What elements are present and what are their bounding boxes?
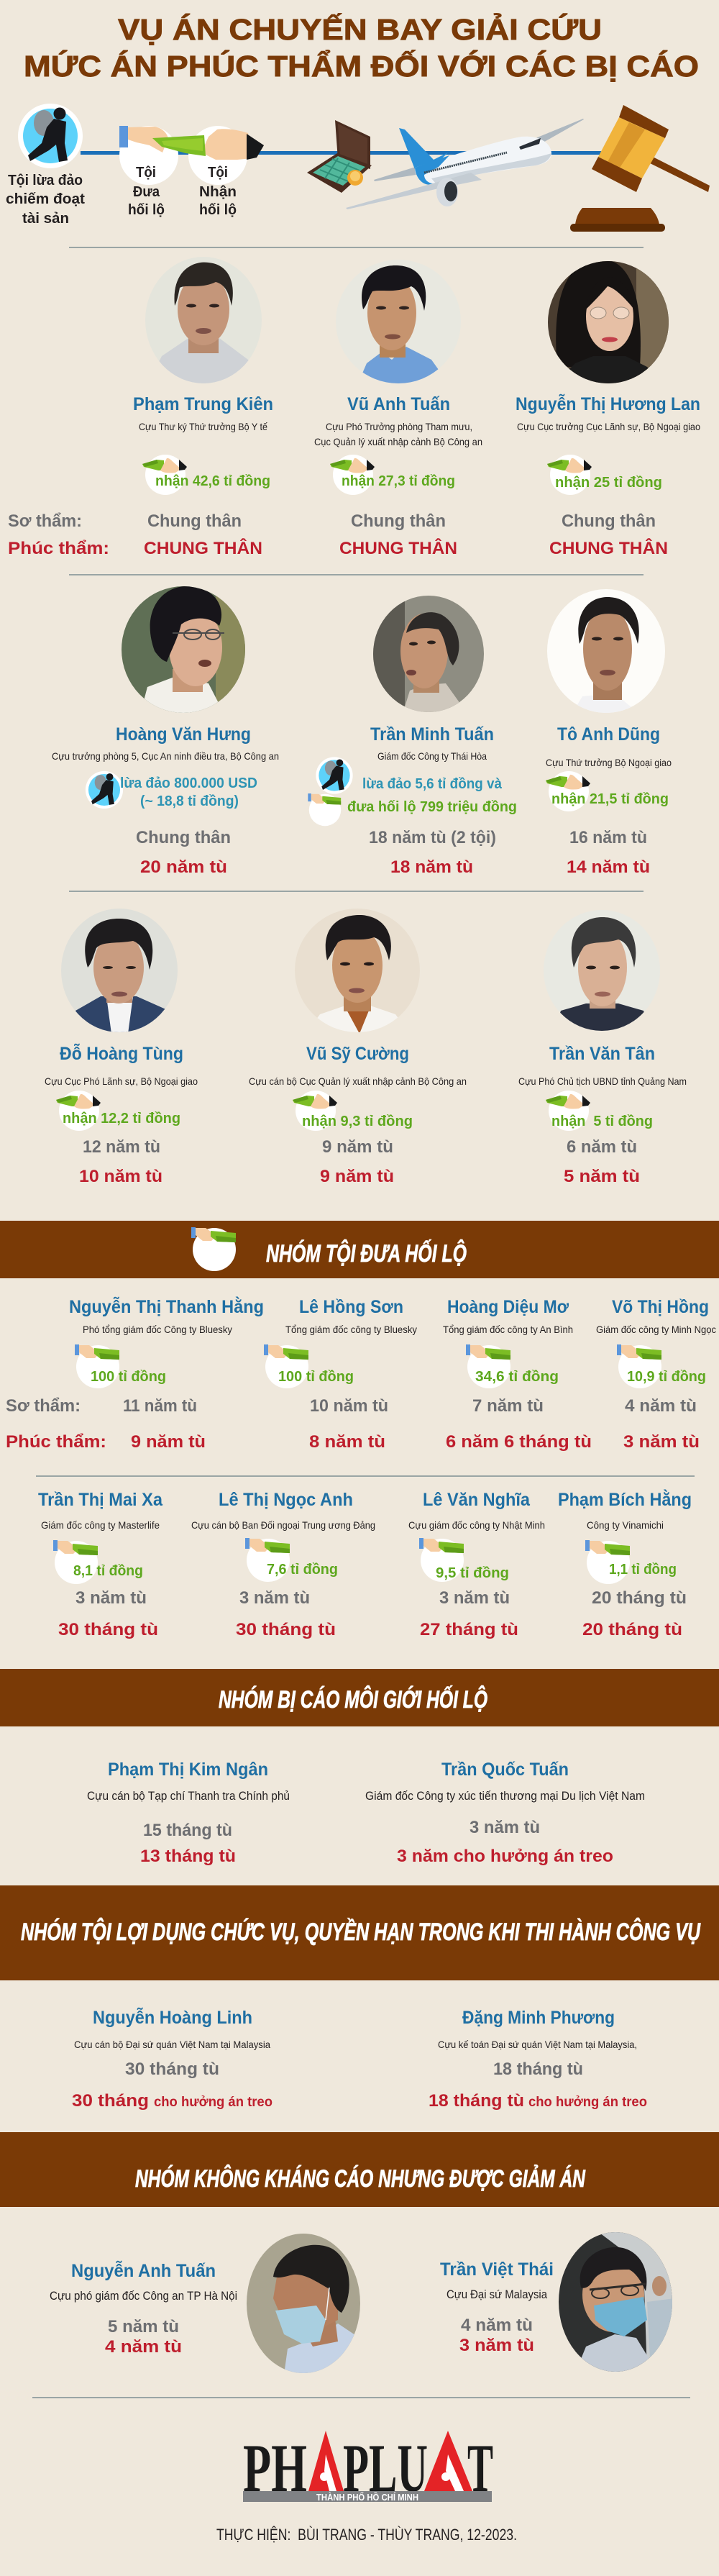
panel: Tô Anh Dũng — [546, 588, 672, 877]
name: Nguyễn Hoàng Linh — [93, 2006, 252, 2028]
icon: receiving bribe — [293, 1091, 337, 1131]
icon: receiving bribe — [56, 1091, 101, 1131]
appeal sentence: CHUNG THÂN — [144, 538, 262, 558]
role: Cựu Phó Trưởng phòng Tham mưu, — [326, 421, 472, 432]
role: Cựu Cục Phó Lãnh sự, Bộ Ngoại giao — [45, 1075, 198, 1087]
panel: Nguyễn Thị Thanh Hằng — [69, 1296, 264, 1452]
appeal sentence: 30 tháng tù — [236, 1620, 336, 1639]
name: Nguyễn Anh Tuấn — [71, 2259, 216, 2281]
amount: fraud: lừa đảo 5,6 tỉ đồng và — [362, 776, 503, 792]
portrait — [546, 259, 671, 385]
panel: Lê Thị Ngọc Anh — [191, 1490, 375, 1639]
name: Đỗ Hoàng Tùng — [60, 1042, 183, 1064]
amount: nhận 5 tỉ đồng — [551, 1114, 653, 1129]
name: Lê Thị Ngọc Anh — [219, 1490, 353, 1510]
label: bribe receiving: Nhận — [199, 184, 237, 200]
appeal sentence: 9 năm tù — [320, 1167, 394, 1186]
appeal sentence: 5 năm tù — [564, 1167, 640, 1186]
amount — [120, 775, 257, 809]
appeal sentence: 3 năm tù — [459, 2336, 534, 2355]
icon: thief with money bag — [18, 104, 83, 168]
role: Cựu cán bộ Đại sứ quán Việt Nam tại Malaysia — [74, 2039, 270, 2050]
first instance sentence: 20 tháng tù — [592, 1588, 687, 1608]
portrait — [245, 2232, 363, 2375]
label: fraud crime: Tội lừa đảo — [8, 173, 83, 188]
panel: row labels first instance: Phúc thẩm: — [8, 539, 109, 558]
name: Lê Hồng Sơn — [299, 1297, 403, 1317]
role: Cục Quản lý xuất nhập cảnh Bộ Công an — [314, 436, 482, 447]
appeal sentence: 18 tháng tù — [429, 2091, 524, 2111]
panel: Hoàng Văn Hưng — [52, 585, 279, 877]
name: Nguyễn Thị Thanh Hằng — [69, 1296, 264, 1317]
role: Cựu cán bộ Tạp chí Thanh tra Chính phủ — [87, 1789, 290, 1803]
first instance sentence: 30 tháng tù — [125, 2060, 219, 2079]
appeal sentence: 20 năm tù — [140, 857, 227, 877]
logo grey bar — [243, 2491, 492, 2502]
amount: 100 tỉ đồng — [278, 1369, 354, 1385]
icon: briefcase of money — [307, 120, 372, 193]
amount: 34,6 tỉ đồng — [475, 1369, 559, 1385]
name: Phạm Bích Hằng — [558, 1488, 692, 1510]
amount: nhận 9,3 tỉ đồng — [302, 1114, 413, 1129]
band: no appeal group — [0, 2132, 719, 2207]
amount: 100 tỉ đồng — [91, 1369, 166, 1385]
panel: Nguyễn Thị Hương Lan — [516, 259, 700, 558]
appeal sentence: 10 năm tù — [79, 1167, 162, 1186]
icon: giving bribe — [75, 1344, 119, 1388]
first instance sentence: 7 năm tù — [472, 1396, 544, 1416]
panel: Phạm Trung Kiên — [133, 255, 273, 558]
icon: gavel — [570, 105, 710, 232]
panel: Nguyễn Anh Tuấn — [50, 2232, 363, 2375]
appeal sentence: 27 tháng tù — [420, 1620, 518, 1639]
amount: nhận 12,2 tỉ đồng — [63, 1111, 180, 1127]
title: VỤ ÁN CHUYẾN BAY GIẢI CỨU — [118, 13, 602, 46]
logo letters: PH — [243, 2430, 307, 2506]
icon: giving bribe — [466, 1344, 510, 1388]
panel: Vũ Anh Tuấn — [314, 258, 482, 558]
title: MỨC ÁN PHÚC THẨM ĐỐI VỚI CÁC BỊ CÁO — [24, 49, 699, 83]
label: bribe giving: Đưa — [133, 184, 160, 200]
amount: 1,1 tỉ đồng — [609, 1562, 677, 1578]
icon: giving bribe — [617, 1344, 661, 1388]
icon: airplane — [346, 119, 584, 209]
role: Cựu cán bộ Cục Quản lý xuất nhập cảnh Bộ Công an — [249, 1075, 467, 1087]
row labels: bribe giving group: Sơ thẩm: — [6, 1396, 81, 1416]
portrait — [362, 265, 439, 383]
first instance sentence: 3 năm tù — [439, 1588, 510, 1608]
name: Trần Quốc Tuấn — [441, 1760, 569, 1780]
panel: Trần Minh Tuấn — [308, 594, 517, 877]
label: bribe receiving: hối lộ — [199, 202, 237, 218]
role: Cựu Phó Chủ tịch UBND tỉnh Quảng Nam — [518, 1075, 687, 1087]
portrait — [293, 907, 421, 1034]
name: Vũ Sỹ Cường — [306, 1044, 409, 1064]
amount: 8,1 tỉ đồng — [73, 1563, 143, 1579]
icon: receiving bribe — [547, 455, 592, 495]
icon: giving bribe — [585, 1540, 630, 1584]
panel: Lê Văn Nghĩa — [408, 1490, 545, 1639]
name: Phạm Trung Kiên — [133, 394, 273, 414]
heading: NHÓM TỘI ĐƯA HỐI LỘ — [266, 1239, 467, 1267]
band: bribery brokers group — [0, 1669, 719, 1726]
label: fraud crime — [6, 173, 85, 227]
heading: NHÓM BỊ CÁO MÔI GIỚI HỐI LỘ — [219, 1685, 487, 1713]
label: bribe giving: hối lộ — [128, 202, 165, 218]
logo red letter Á — [308, 2431, 344, 2491]
icon: receiving bribe — [330, 455, 375, 495]
panel: Phạm Bích Hằng — [558, 1488, 692, 1639]
logo: Pháp Luật — [243, 2430, 493, 2506]
panel: Phạm Thị Kim Ngân — [87, 1760, 290, 1866]
role: Công ty Vinamichi — [587, 1519, 664, 1531]
role: Cựu trưởng phòng 5, Cục An ninh điều tra, Bộ Công an — [52, 750, 279, 762]
icon: giving bribe — [308, 793, 341, 826]
role: Cựu Thư ký Thứ trưởng Bộ Y tế — [139, 421, 267, 432]
amount: (~ 18,8 tỉ đồng) — [140, 793, 239, 809]
first instance sentence: Chung thân — [136, 828, 231, 847]
title — [24, 13, 699, 83]
icon: thief — [316, 757, 353, 794]
logo letters — [243, 2430, 493, 2506]
divider — [69, 574, 644, 575]
portrait — [60, 907, 179, 1034]
name: Hoàng Diệu Mơ — [447, 1297, 569, 1317]
first instance sentence: 18 năm tù (2 tội) — [369, 828, 496, 847]
appeal sentence: 3 năm tù — [623, 1432, 700, 1452]
panel: row labels first instance: Sơ thẩm: — [8, 511, 82, 531]
name: Trần Minh Tuấn — [370, 724, 494, 745]
first instance sentence: 4 năm tù — [625, 1396, 697, 1416]
amount: 7,6 tỉ đồng — [267, 1562, 338, 1578]
portrait — [144, 255, 265, 385]
name: Trần Việt Thái — [440, 2259, 554, 2280]
divider — [36, 1475, 695, 1477]
logo subtitle: THÀNH PHỐ HỒ CHÍ MINH — [316, 2492, 418, 2503]
logo letters: PLU — [343, 2430, 428, 2506]
appeal sentence — [429, 2091, 647, 2111]
appeal sentence: cho hưởng án treo — [528, 2095, 647, 2110]
portrait — [372, 594, 485, 714]
icon: hands exchanging money — [119, 126, 264, 185]
first instance sentence: 3 năm tù — [239, 1588, 310, 1608]
role — [314, 421, 482, 447]
icon: receiving bribe — [142, 455, 187, 495]
portrait — [546, 588, 667, 714]
appeal sentence — [72, 2091, 273, 2111]
role: Tổng giám đốc công ty Bluesky — [285, 1324, 417, 1335]
icon: giving bribe — [419, 1538, 464, 1582]
panel: Vũ Sỹ Cường — [249, 907, 467, 1186]
label: fraud crime: tài sản — [22, 211, 69, 227]
portrait — [120, 585, 247, 714]
name: Trần Văn Tân — [549, 1044, 655, 1064]
role: Cựu Đại sứ Malaysia — [446, 2288, 547, 2301]
first instance sentence: 12 năm tù — [83, 1137, 160, 1157]
first instance sentence: Chung thân — [147, 511, 242, 531]
icon: giving bribe — [245, 1538, 290, 1582]
divider — [69, 247, 644, 248]
first instance sentence: 15 tháng tù — [143, 1821, 232, 1840]
role: Cựu kế toán Đại sứ quán Việt Nam tại Malaysia, — [438, 2039, 637, 2050]
icon: receiving bribe — [546, 771, 590, 811]
label: bribe receiving — [199, 165, 237, 218]
icon: receiving bribe — [546, 1091, 590, 1131]
amount: nhận 21,5 tỉ đồng — [551, 791, 669, 807]
icon: thief — [86, 771, 123, 809]
appeal sentence: CHUNG THÂN — [339, 538, 457, 558]
label: fraud crime: chiếm đoạt — [6, 191, 85, 207]
panel: Lê Hồng Sơn — [264, 1297, 417, 1452]
appeal sentence: 18 năm tù — [390, 857, 473, 877]
panel: row labels first instance — [8, 511, 109, 558]
appeal sentence: 13 tháng tù — [140, 1847, 236, 1866]
first instance sentence: Chung thân — [562, 511, 656, 531]
first instance sentence: Chung thân — [351, 511, 446, 531]
role: Cựu giám đốc công ty Nhật Minh — [408, 1519, 545, 1531]
header illustration — [6, 104, 710, 232]
role: Cựu phó giám đốc Công an TP Hà Nội — [50, 2289, 237, 2303]
logo letters: T — [467, 2430, 493, 2506]
appeal sentence: CHUNG THÂN — [549, 538, 668, 558]
first instance sentence: 16 năm tù — [569, 828, 647, 847]
portrait — [557, 2231, 674, 2373]
role: Cựu Cục trưởng Cục Lãnh sự, Bộ Ngoại giao — [517, 421, 700, 432]
first instance sentence: 10 năm tù — [310, 1396, 388, 1416]
label: bribe giving — [128, 165, 165, 218]
appeal sentence: 30 tháng tù — [58, 1620, 158, 1639]
name: Đặng Minh Phương — [462, 2008, 615, 2028]
name: Nguyễn Thị Hương Lan — [516, 393, 700, 414]
first instance sentence: 6 năm tù — [567, 1137, 637, 1157]
appeal sentence: cho hưởng án treo — [154, 2095, 273, 2110]
amount: lừa đảo 800.000 USD — [120, 775, 257, 791]
row labels: bribe giving group — [6, 1396, 106, 1452]
first instance sentence: 3 năm tù — [470, 1818, 540, 1837]
name: Lê Văn Nghĩa — [423, 1490, 531, 1510]
logo red letter Ậ — [424, 2431, 472, 2491]
name: Hoàng Văn Hưng — [116, 724, 251, 745]
name: Trần Thị Mai Xa — [38, 1490, 163, 1510]
panel: Trần Văn Tân — [518, 909, 687, 1186]
icon: giving bribe — [264, 1344, 308, 1388]
panel: Đặng Minh Phương — [429, 2008, 647, 2111]
icon: giving bribe — [53, 1540, 98, 1584]
role: Cựu Thứ trưởng Bộ Ngoại giao — [546, 757, 672, 768]
label: bribe receiving: Tội — [208, 165, 228, 181]
icon: giving bribe — [191, 1227, 236, 1271]
appeal sentence: 9 năm tù — [131, 1432, 206, 1452]
appeal sentence: 6 năm 6 tháng tù — [446, 1432, 592, 1452]
amount: bribe: đưa hối lộ 799 triệu đồng — [347, 799, 517, 815]
role: Phó tổng giám đốc Công ty Bluesky — [83, 1324, 232, 1335]
appeal sentence: 3 năm cho hưởng án treo — [397, 1847, 613, 1866]
label: bribe giving: Tội — [136, 165, 156, 181]
role: Tổng giám đốc công ty An Bình — [443, 1324, 573, 1335]
panel: Trần Thị Mai Xa — [38, 1490, 163, 1639]
panel: Đỗ Hoàng Tùng — [45, 907, 198, 1186]
role: Cựu cán bộ Ban Đối ngoại Trung ương Đảng — [191, 1519, 375, 1531]
credit line: THỰC HIỆN: BÙI TRANG - THÙY TRANG, 12-2023. — [216, 2526, 517, 2544]
name: Phạm Thị Kim Ngân — [108, 1760, 268, 1780]
name: Vũ Anh Tuấn — [347, 394, 450, 414]
first instance sentence: 3 năm tù — [75, 1588, 147, 1608]
panel: Hoàng Diệu Mơ — [443, 1297, 592, 1452]
appeal sentence: 14 năm tù — [567, 857, 650, 877]
appeal sentence: 4 năm tù — [105, 2337, 182, 2357]
divider — [32, 2397, 690, 2398]
role: Giám đốc Công ty xúc tiến thương mại Du lịch Việt Nam — [365, 1789, 645, 1803]
blue timeline line — [81, 151, 605, 155]
amount: nhận 25 tỉ đồng — [555, 475, 662, 491]
role: Giám đốc công ty Masterlife — [41, 1519, 160, 1531]
first instance sentence: 11 năm tù — [123, 1396, 197, 1416]
portrait — [560, 917, 644, 1031]
role: Giám đốc Công ty Thái Hòa — [377, 750, 487, 762]
band: bribe giving group — [0, 1221, 719, 1278]
first instance sentence: 9 năm tù — [322, 1137, 393, 1157]
appeal sentence: 20 tháng tù — [582, 1620, 682, 1639]
name: Tô Anh Dũng — [557, 724, 660, 745]
row labels: bribe giving group: Phúc thẩm: — [6, 1432, 106, 1452]
first instance sentence: 4 năm tù — [461, 2316, 533, 2335]
first instance sentence: 5 năm tù — [108, 2317, 179, 2336]
amount: nhận 42,6 tỉ đồng — [155, 473, 270, 489]
divider — [69, 891, 644, 892]
panel: Trần Việt Thái — [440, 2231, 674, 2373]
amount: nhận 27,3 tỉ đồng — [342, 473, 455, 489]
amount: 9,5 tỉ đồng — [436, 1565, 509, 1581]
panel: Trần Quốc Tuấn — [365, 1760, 645, 1866]
band: abuse of position group — [0, 1885, 719, 1980]
panel: Võ Thị Hồng — [596, 1297, 716, 1452]
panel: Nguyễn Hoàng Linh — [72, 2006, 273, 2111]
first instance sentence: 18 tháng tù — [493, 2060, 583, 2079]
name: Võ Thị Hồng — [612, 1297, 709, 1317]
amount: 10,9 tỉ đồng — [627, 1369, 706, 1385]
appeal sentence: 30 tháng — [72, 2091, 149, 2111]
appeal sentence: 8 năm tù — [309, 1432, 385, 1452]
